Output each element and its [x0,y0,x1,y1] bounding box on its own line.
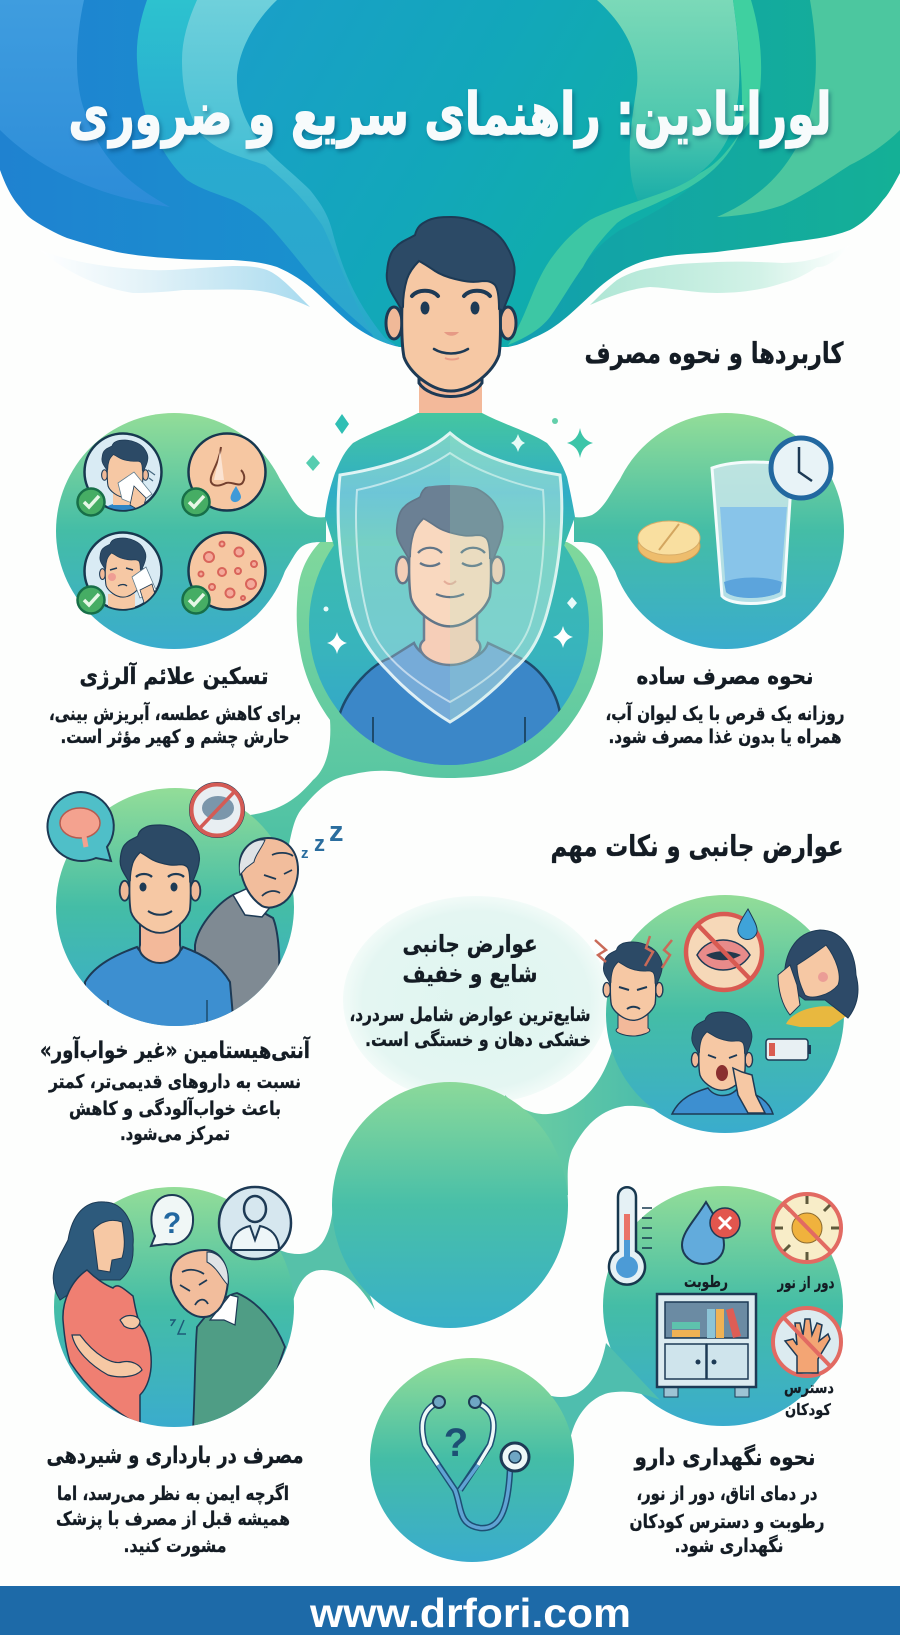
icon: no sunlight [773,1194,841,1262]
icon: dry mouth [686,909,762,990]
green ribbon [508,133,740,345]
shoulders blob [325,413,575,546]
text: non-drowsy description [48,1071,301,1145]
heading: common and mild side effects: شایع و خفیف [402,960,538,988]
connector stethoscope to storage [510,1343,660,1440]
left light zone [0,0,170,207]
icon: yawning man [672,1012,773,1114]
label: out of children's reach [784,1378,834,1419]
icon: sneezing man [84,434,162,515]
text: side effects description [350,1004,591,1051]
icon: cabinet [657,1294,756,1397]
young man, alert [85,825,235,1040]
text: storage description [630,1483,824,1557]
zzz symbol: z [314,831,325,856]
allergy circle background [56,413,292,649]
icon: check badges [78,488,210,614]
text: side effects description: شایع‌ترین عوارض شامل سردرد، [350,1004,590,1026]
text: storage description: رطوبت و دسترس کودکان [630,1511,824,1533]
icon: crossed brain [190,782,244,838]
text: allergy relief description: حارش چشم و کهیر مؤثر است. [60,726,290,748]
heading: common and mild side effects: عوارض جانبی [402,930,538,958]
icon: question bubble [151,1195,193,1246]
connector right circle to middle blob [500,1050,680,1200]
label: away from light: دور از نور [777,1273,834,1292]
pale text backdrop [343,896,609,1104]
side effects circle background [606,895,844,1133]
icon: stethoscope [422,1396,529,1528]
text: simple dosage description [606,701,844,748]
icon: protective shield [338,433,562,722]
zzz symbol [301,816,344,862]
panel: simple dosage [574,413,844,748]
panel: central protected person [250,413,603,862]
label: out of children's reach: کودکان [785,1400,832,1419]
label: out of children's reach: دسترس [784,1378,834,1397]
ring blob background and stem [250,542,603,862]
text: side effects description: خشکی دهان و خستگی است. [365,1028,591,1051]
text: simple dosage description: همراه یا بدون غذا مصرف شود. [608,726,842,748]
text: pregnancy description [56,1482,290,1557]
inner circle [309,485,589,765]
pregnant woman [53,1202,151,1425]
text: storage description: نگهداری شود. [674,1534,784,1557]
connector left circle to middle blob [270,1190,375,1330]
light cyan band [182,0,382,342]
text: allergy relief description: برای کاهش عطسه، آبریزش بینی، [49,701,301,725]
label: humidity: رطوبت [684,1272,728,1291]
storage circle background [603,1186,843,1426]
heading: storage: نحوه نگهداری دارو [634,1444,816,1471]
icon: stethoscope: ? [444,1421,468,1465]
icon: tired woman [778,930,858,1027]
heading: allergy relief: تسکین علائم آلرژی [80,661,268,690]
zzz symbol: z [329,816,344,848]
icon: low battery [766,1039,811,1060]
icon: brain speech bubble [47,792,114,861]
far right zone [717,0,900,217]
elderly man [170,1250,285,1430]
text: pregnancy description: همیشه قبل از مصرف با پزشک [56,1508,290,1530]
heading: non-drowsy: آنتی‌هیستامین «غیر خواب‌آور» [40,1035,311,1064]
footer url: www.drfori.com [309,1590,631,1635]
stethoscope circle [370,1358,574,1562]
footer bar [0,1586,900,1635]
central colour field [236,0,685,347]
text: pregnancy description: مشورت کنید. [124,1535,226,1557]
icon: doctor [219,1187,291,1259]
panel: allergy symptom relief [49,413,326,748]
icon: sparkles [306,414,593,654]
panel: pregnancy and breastfeeding [46,1187,304,1557]
old man, drowsy [195,838,298,1040]
text: non-drowsy description: تمرکز می‌شود. [120,1123,230,1145]
text: allergy relief description [49,701,301,748]
icon: runny nose [188,434,266,510]
icon: question bubble: ? [163,1207,181,1240]
heading: pregnancy: مصرف در بارداری و شیردهی [46,1443,304,1469]
text: non-drowsy description: نسبت به داروهای قدیمی‌تر، کمتر [48,1071,301,1093]
panel: non-drowsy antihistamine [40,782,344,1145]
panel: storage [370,1186,843,1562]
text: pregnancy description: اگرچه ایمن به نظر می‌رسد، اما [57,1482,289,1505]
non-drowsy circle background [56,788,294,1026]
heading: simple dosage: نحوه مصرف ساده [636,664,814,690]
middle blob [332,1082,568,1328]
zzz symbol: z [301,845,308,862]
dosage circle background [608,413,844,649]
dosage connector [574,470,630,592]
text: simple dosage description: روزانه یک قرص با یک لیوان آب، [606,701,844,725]
icon: humidity drop [682,1202,740,1264]
teal band [137,0,420,350]
panel: common side effects [270,895,858,1330]
icon: clock [771,438,831,498]
icon: thermometer [609,1187,652,1285]
right bright strip [733,0,761,133]
icon: tablet [638,521,700,563]
icon: keep away from children [773,1308,841,1376]
top person head [386,217,516,424]
allergy connector [270,470,326,592]
text: storage description: در دمای اتاق، دور از نور، [636,1483,818,1505]
icon: watery eyes [84,532,162,612]
icon: glass of water [712,462,792,604]
text: non-drowsy description: باعث خواب‌آلودگی و کاهش [69,1096,281,1120]
header wave background [0,0,900,360]
icon: skin rash [188,532,266,610]
light green zone [597,0,739,205]
resting person [340,482,560,770]
heading: common and mild side effects [402,930,538,988]
pregnancy circle background [54,1187,294,1427]
icon: headache man [595,936,672,1036]
